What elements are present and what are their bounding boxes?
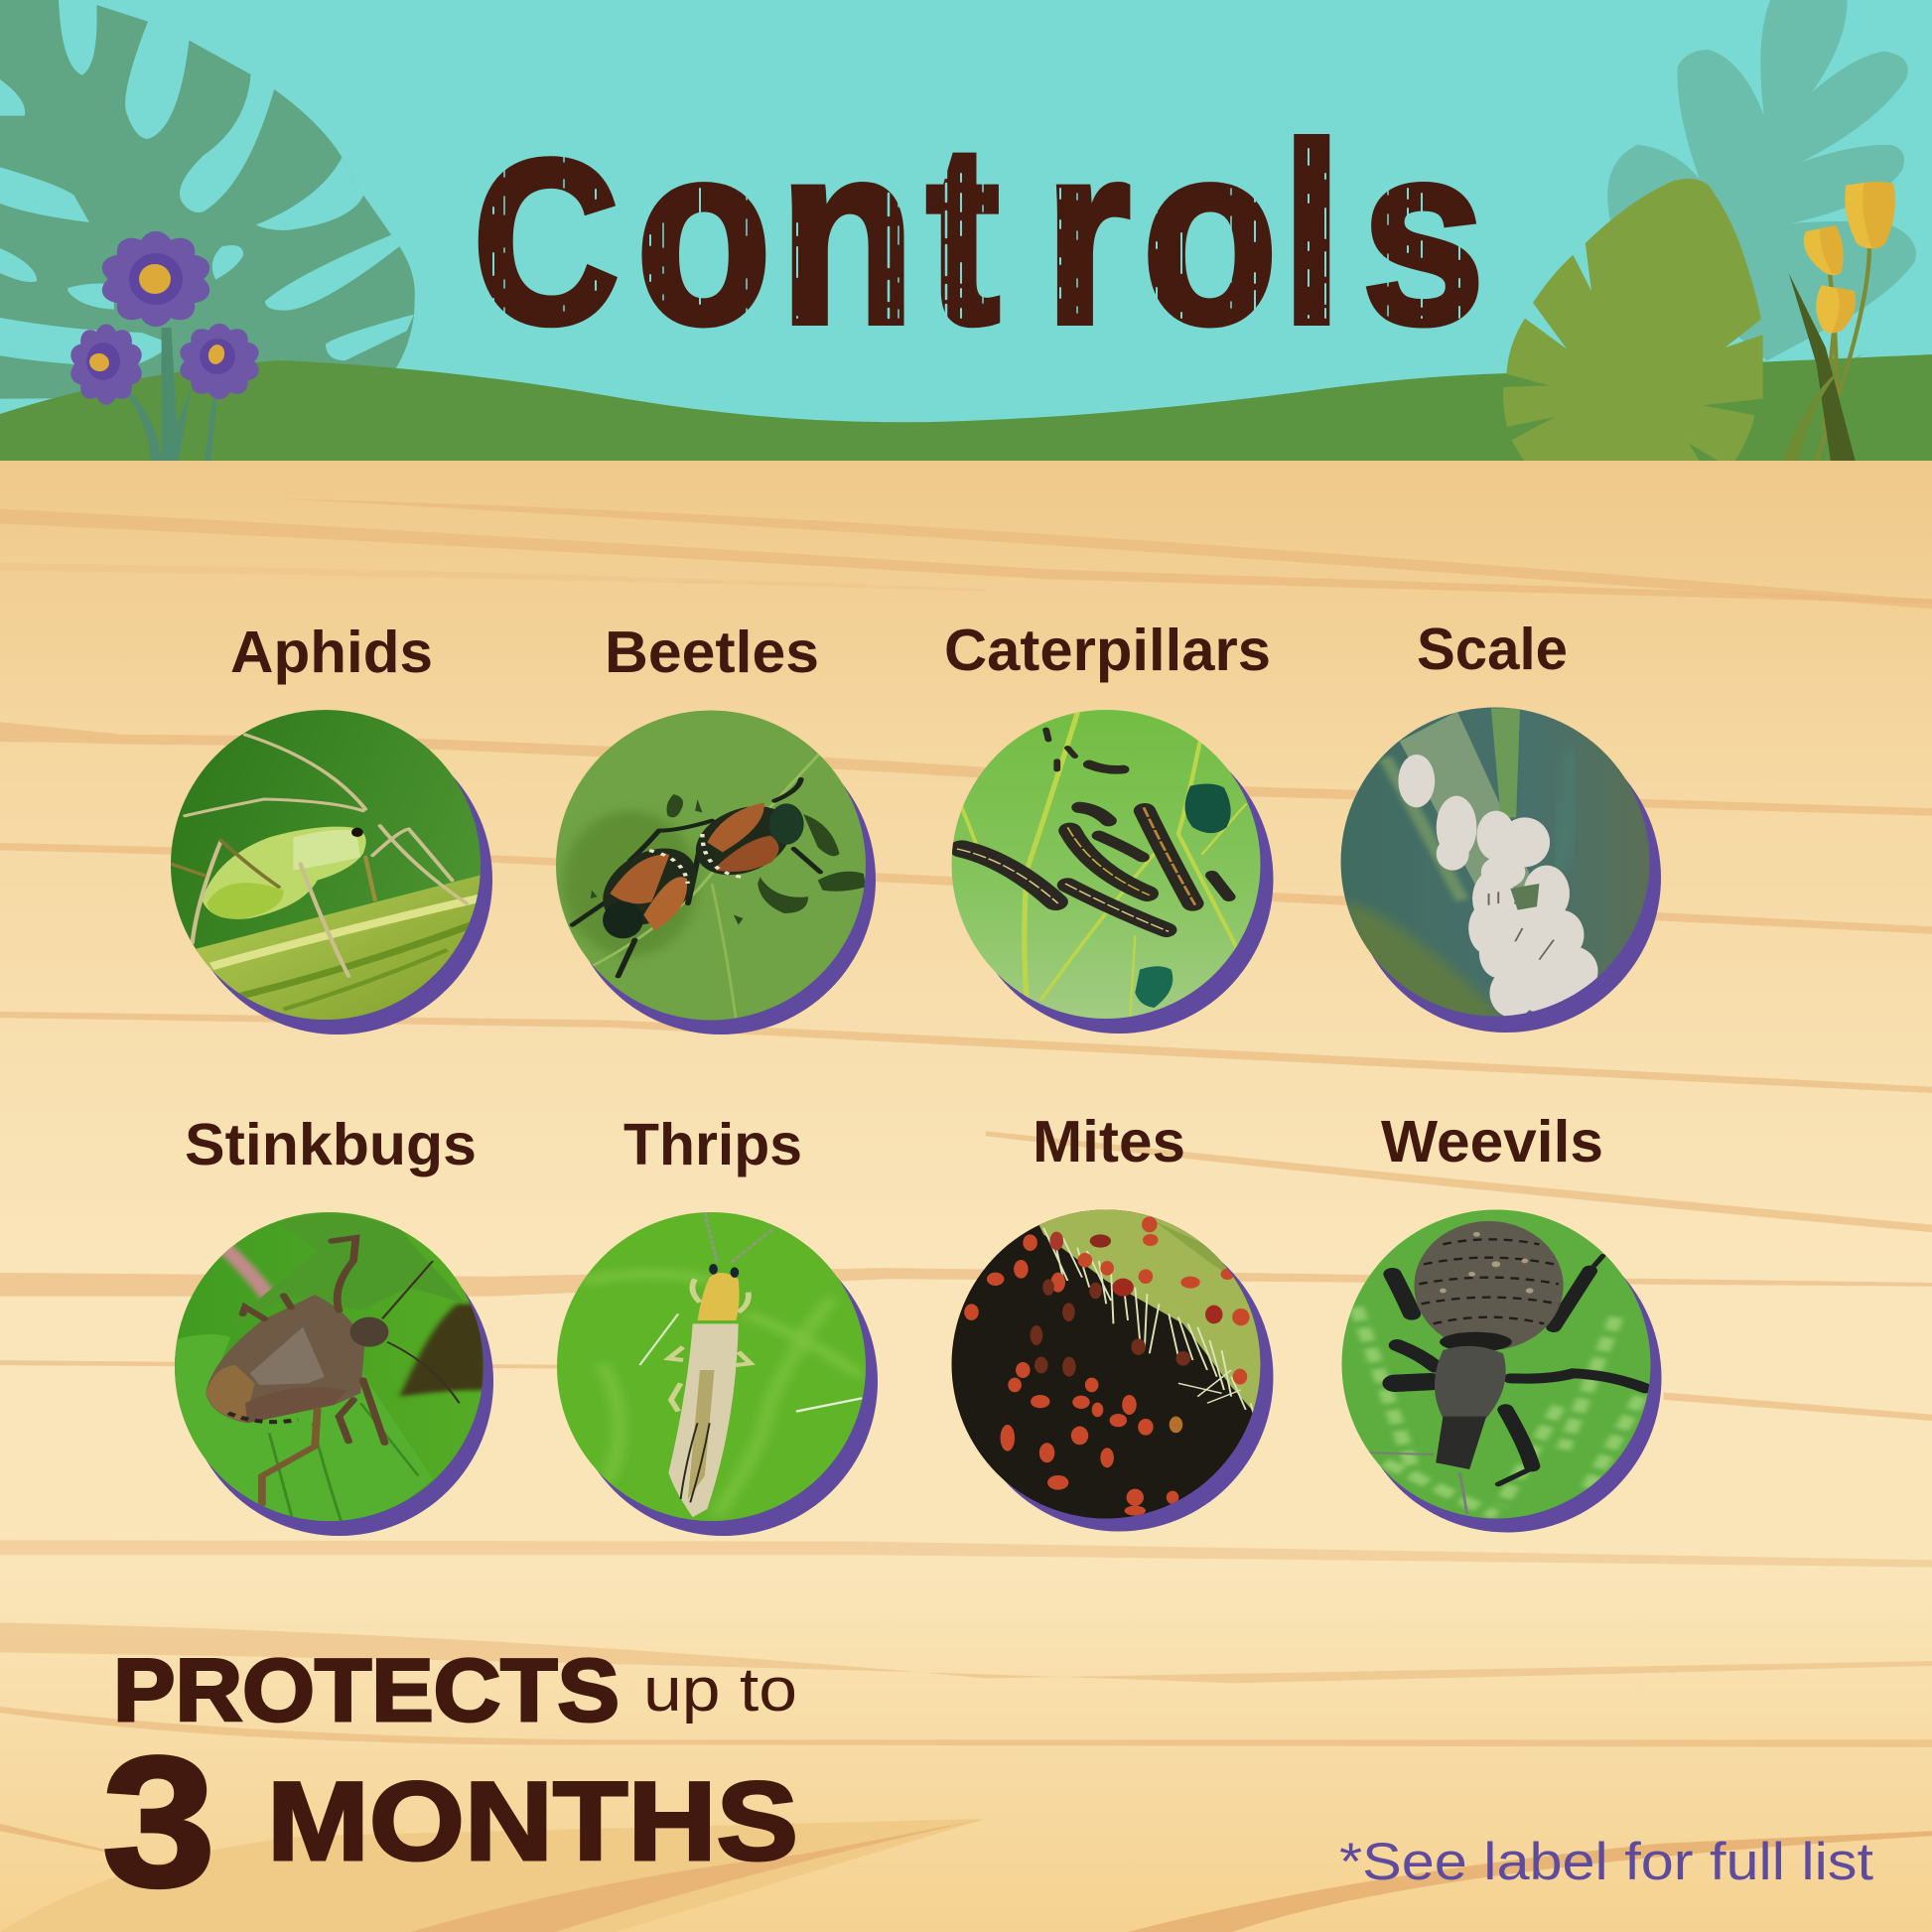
card: Caterpillars — [946, 627, 1273, 1034]
card: Beetles — [556, 629, 876, 1035]
card: Mites — [951, 1119, 1273, 1531]
label: Weevils: Weevils — [1381, 1109, 1603, 1174]
footnote: *See label for full list — [1339, 1833, 1873, 1891]
header sky — [0, 0, 1932, 461]
photo: weevil on leaf — [1342, 1209, 1650, 1519]
photo: scale insects on stem — [1340, 707, 1650, 1017]
headline: PROTECTS up to 3 MONTHS: up to — [643, 1656, 797, 1725]
headline: PROTECTS up to 3 MONTHS — [102, 1640, 798, 1925]
ground hill — [0, 354, 1932, 461]
card: Scale — [1340, 626, 1661, 1033]
label: Aphids: Aphids — [230, 620, 433, 685]
title: Controls — [473, 91, 1485, 377]
label: Mites: Mites — [1033, 1109, 1185, 1174]
photo: spider mites — [951, 1209, 1261, 1519]
label: Thrips: Thrips — [623, 1112, 802, 1177]
purple flowers — [68, 231, 262, 461]
card: Weevils — [1342, 1119, 1662, 1533]
photo: Japanese beetles — [556, 711, 866, 1021]
card: Stinkbugs — [175, 1122, 493, 1536]
wood background panel — [0, 461, 1932, 1932]
photo: aphid — [171, 710, 481, 1020]
photo: caterpillars on leaf — [951, 710, 1261, 1019]
label: Stinkbugs: Stinkbugs — [185, 1112, 477, 1177]
right green leaf — [1503, 179, 1763, 461]
headline: PROTECTS up to 3 MONTHS: PROTECTS — [113, 1640, 620, 1739]
right background leaf — [1607, 0, 1916, 360]
monstera leaf with flowers side decoration — [0, 0, 415, 399]
label: Beetles: Beetles — [605, 620, 819, 685]
label: Caterpillars: Caterpillars — [944, 618, 1271, 683]
label: Scale: Scale — [1417, 617, 1568, 682]
card: Aphids — [171, 629, 492, 1035]
headline: PROTECTS up to 3 MONTHS: MONTHS — [267, 1759, 798, 1883]
card: Thrips — [557, 1122, 878, 1536]
tulips — [1782, 182, 1895, 461]
headline: PROTECTS up to 3 MONTHS: 3 — [102, 1720, 215, 1925]
photo: thrips on leaf — [557, 1212, 866, 1521]
photo: stink bug on leaf — [175, 1212, 483, 1521]
